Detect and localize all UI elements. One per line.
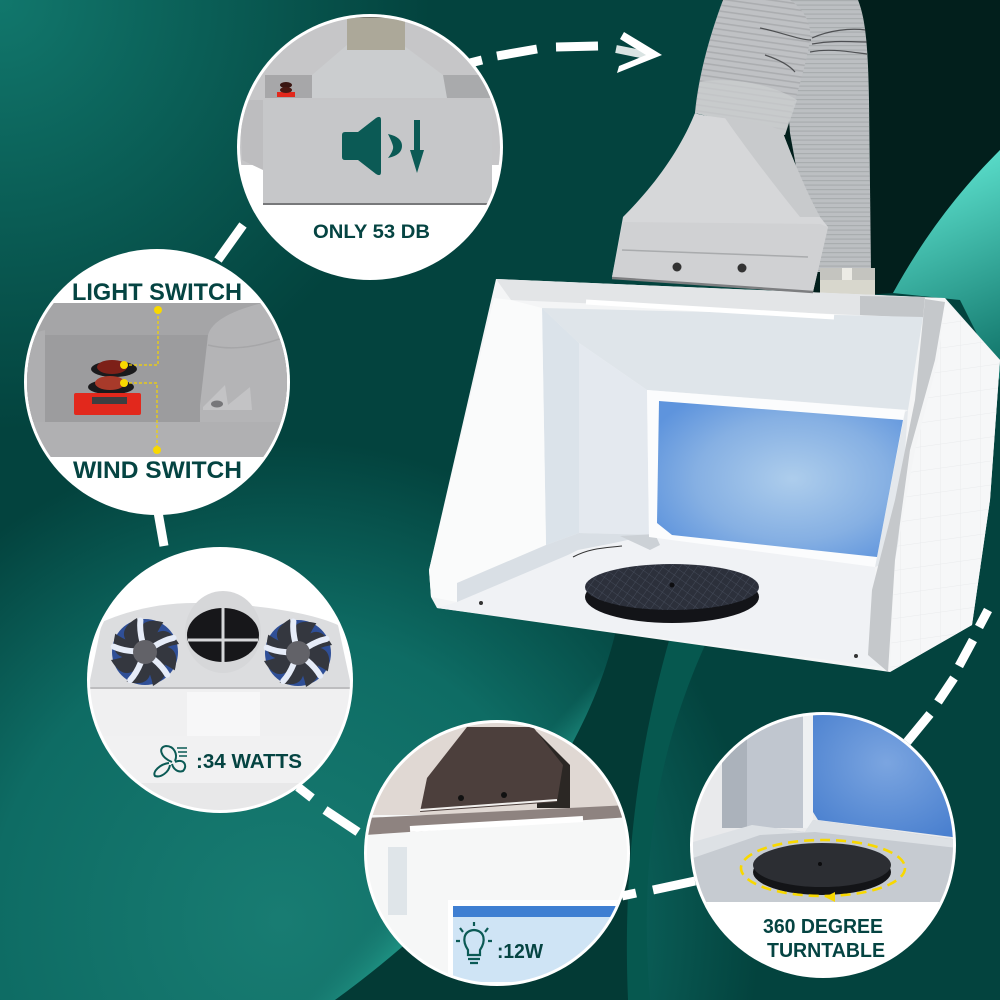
icon: speaker with down arrow — [342, 117, 424, 175]
label: 360 degree turntable: TURNTABLE — [767, 940, 885, 962]
filter panel — [647, 390, 905, 567]
dashed connector: fan to light — [298, 787, 358, 832]
dashed connector: light to turntable — [622, 881, 695, 896]
right wing — [868, 299, 1000, 672]
icon: turntable disc with rotation ring — [741, 840, 905, 902]
turntable — [585, 564, 759, 623]
hood adapter — [612, 113, 828, 292]
circle: fans — [85, 547, 365, 813]
icon: center vent — [185, 591, 261, 673]
label: light switch: LIGHT SWITCH — [72, 279, 242, 306]
dashed connector: noise to switch — [218, 225, 243, 260]
dashed connector: switch to fan — [158, 512, 164, 546]
arrow: dashed connector to booth — [470, 32, 662, 73]
circle: light — [364, 720, 630, 990]
product: spray booth with hose — [429, 0, 1000, 672]
label: only 53 db: ONLY 53 DB — [313, 222, 430, 243]
hose — [695, 0, 875, 295]
label: wind switch: WIND SWITCH — [73, 457, 242, 484]
callout lines — [120, 306, 162, 454]
label: 12w: :12W — [497, 941, 543, 963]
icon: fan symbol — [154, 746, 187, 776]
icon: right fan — [259, 614, 337, 692]
label: 34 watts: :34 WATTS — [196, 750, 302, 773]
circle: noise level — [230, 10, 510, 285]
label: 360 degree turntable: 360 DEGREE — [763, 916, 883, 938]
icon: left fan — [106, 613, 184, 691]
light bar — [586, 302, 834, 317]
icon: light bulb — [456, 922, 492, 963]
circle: switches — [20, 249, 300, 515]
booth shell — [429, 279, 1000, 672]
label: 360 degree turntable — [763, 916, 885, 962]
circle: turntable — [690, 712, 960, 987]
dashed connector: turntable to booth — [907, 610, 988, 742]
